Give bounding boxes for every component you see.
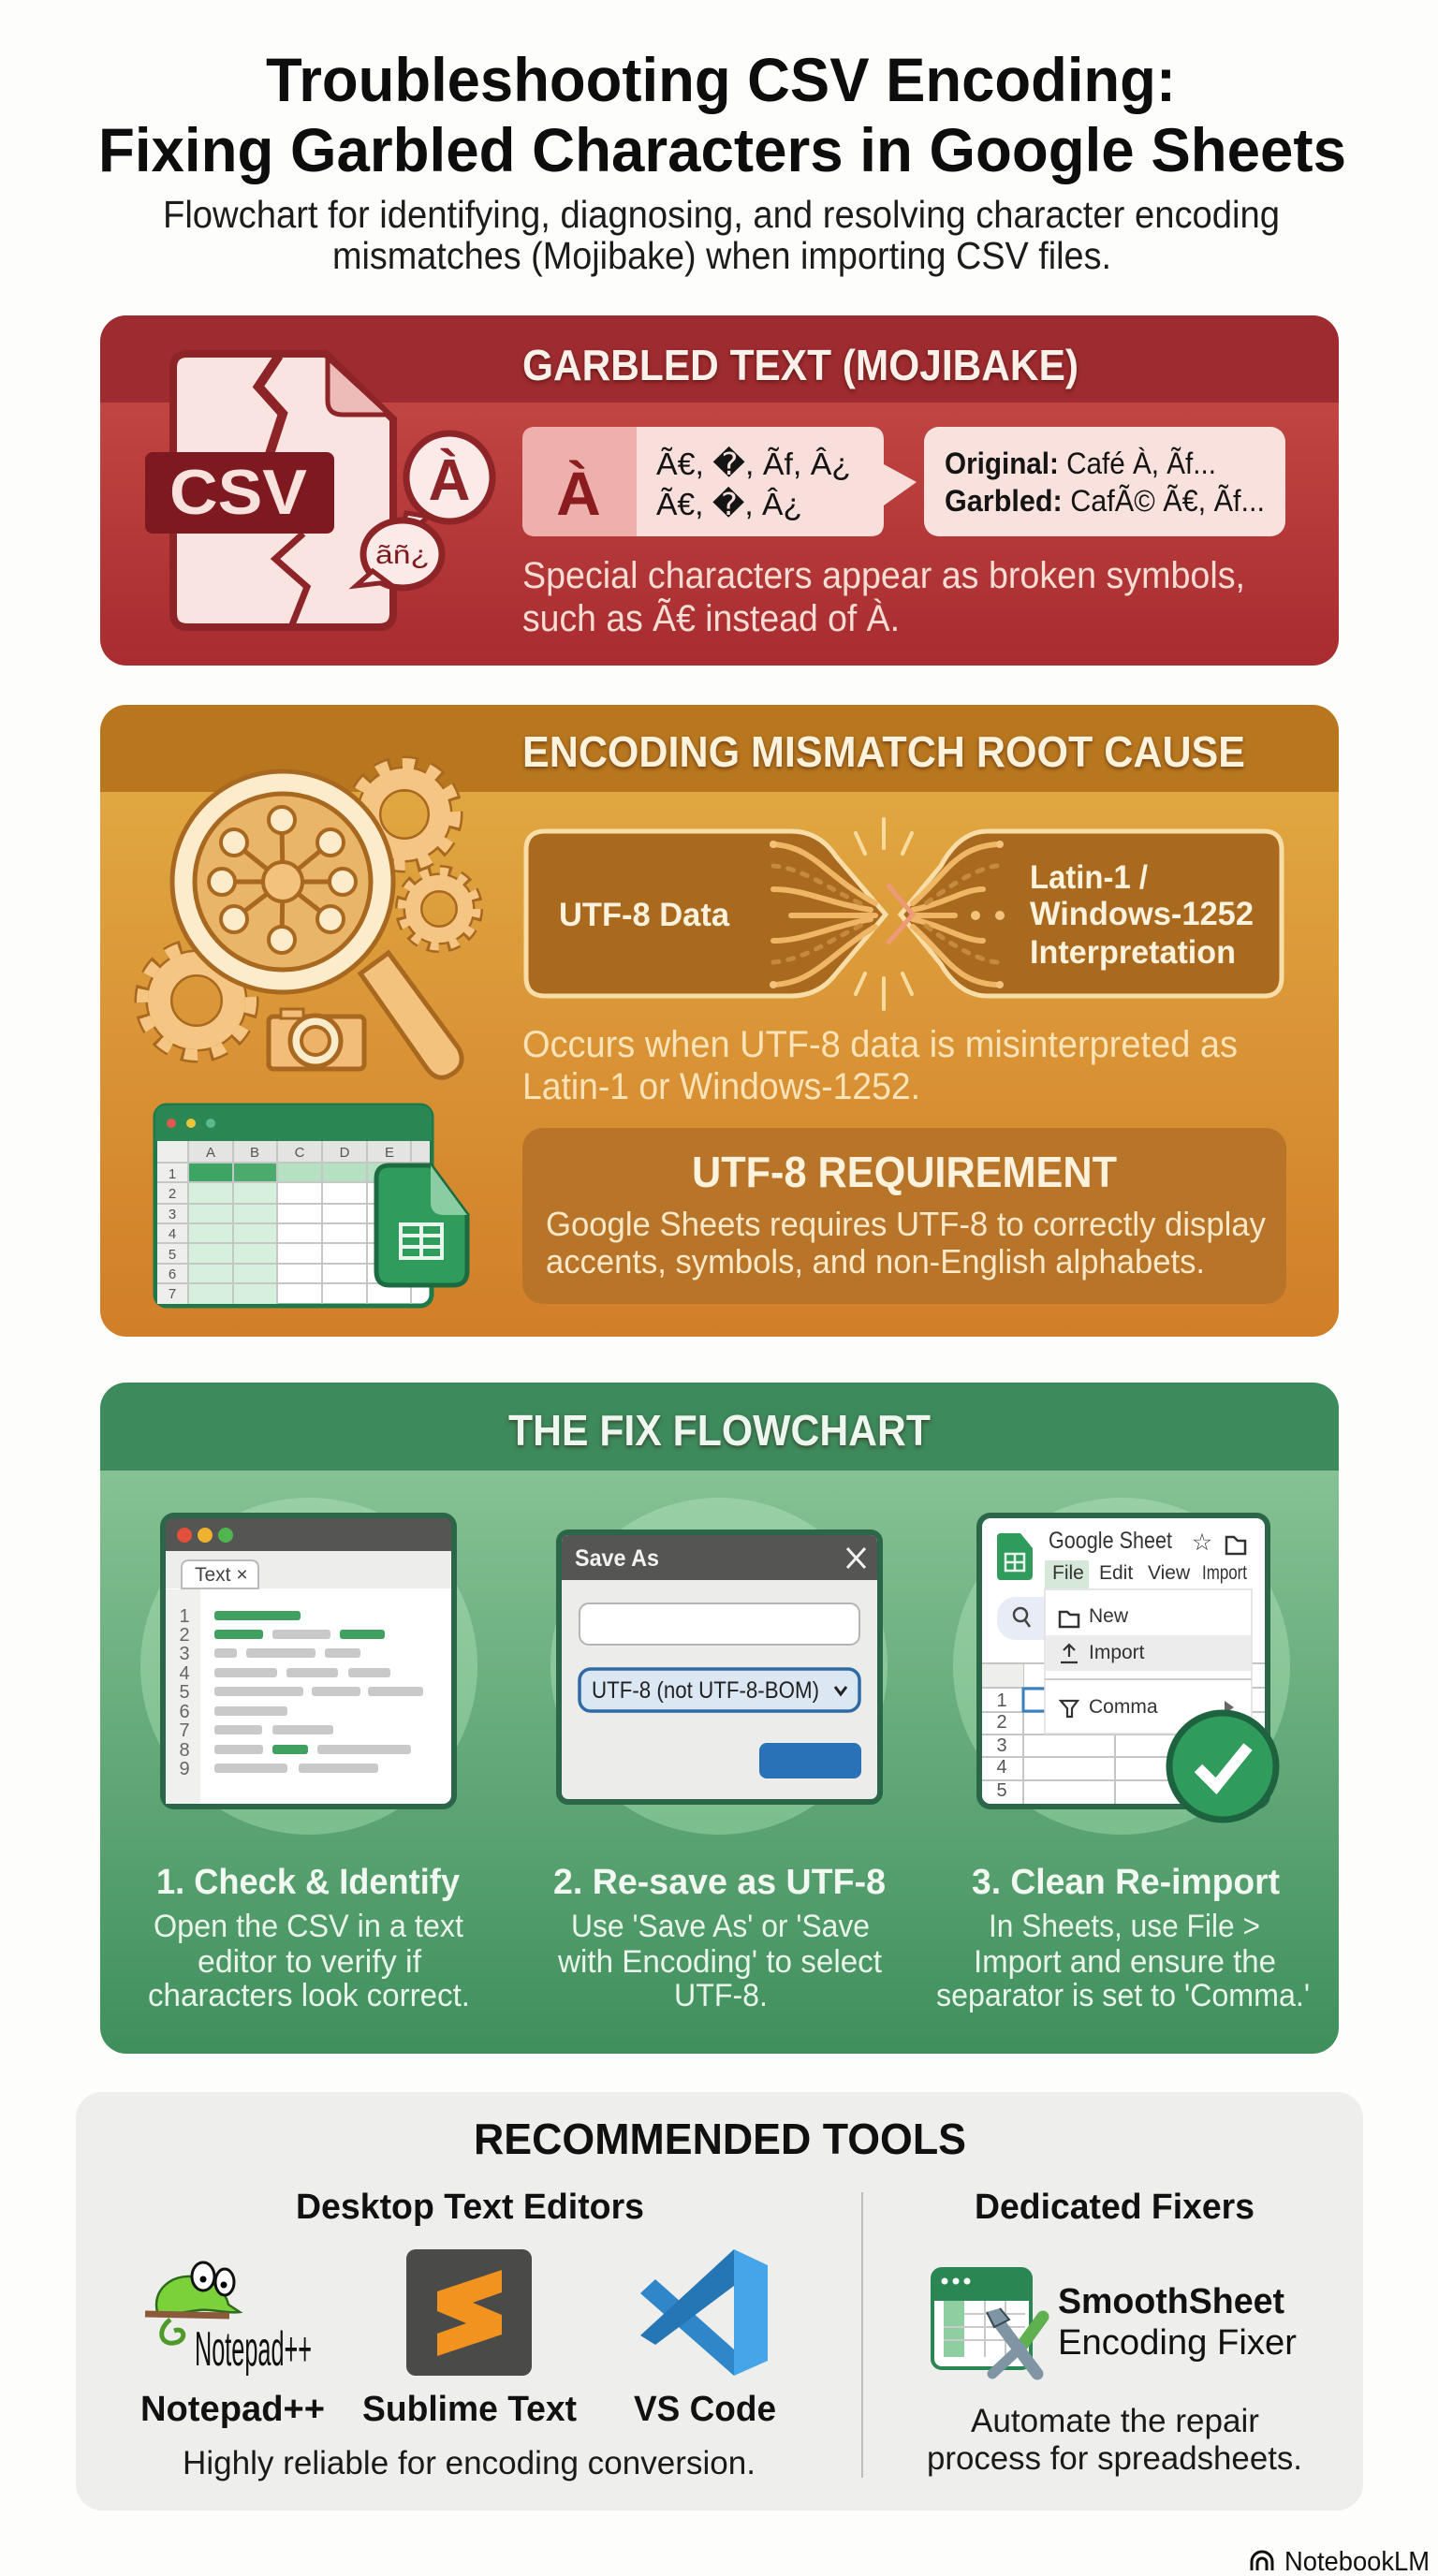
step 1: text editor window: 8 [179, 1740, 190, 1761]
callout: UTF-8 requirement: accents, symbols, and non-English alphabets. [546, 1242, 1205, 1281]
diagram: encoding collision: UTF-8 Data [559, 897, 730, 933]
step 2: save as dialog [550, 1498, 888, 1835]
step 2 text [553, 1863, 886, 2013]
card: original vs garbled: Original: Café À, Ãf... [945, 446, 1216, 480]
panel: garbled text [100, 315, 1339, 666]
card: garbled variants: Ã€, �, Â¿ [656, 486, 802, 521]
step 3: sheets import window [953, 1498, 1290, 1835]
step 1 text [148, 1863, 470, 2013]
diagram: encoding collision: Interpretation [1030, 934, 1236, 971]
heading: dedicated fixers: Dedicated Fixers [975, 2188, 1255, 2227]
step 1: text editor window: 6 [179, 1702, 190, 1722]
diagram: encoding collision [526, 819, 1282, 1009]
tool labels: Notepad++ [140, 2390, 325, 2429]
description: root cause [522, 1024, 1238, 1107]
text: SmoothSheet name: SmoothSheet [1058, 2282, 1284, 2321]
icon: spreadsheet window: 6 [169, 1266, 176, 1282]
step 1: text editor window: 3 [179, 1644, 190, 1664]
icon: broken CSV file: À [429, 448, 470, 513]
step 1 text: 1. Check & Identify [156, 1863, 460, 1902]
step 3: sheets import window: Google Sheet [1049, 1528, 1172, 1554]
tool labels: VS Code [634, 2390, 776, 2429]
step 2 text: Use 'Save As' or 'Save [571, 1909, 870, 1944]
step 2: save as dialog: Save As [575, 1545, 659, 1572]
heading: recommended tools: RECOMMENDED TOOLS [474, 2115, 966, 2163]
step 3: sheets import window: 4 [996, 1757, 1007, 1778]
step 2 text: UTF-8. [674, 1978, 768, 2013]
icon: spreadsheet window: C [295, 1145, 305, 1161]
card: garbled variants: Ã€, �, Ãf, Â¿ [656, 446, 851, 481]
step 1: text editor window: 2 [179, 1625, 190, 1646]
step 3 text [936, 1863, 1310, 2013]
step 1: text editor window: 9 [179, 1759, 190, 1779]
title: Fixing Garbled Characters in Google Sheets [98, 115, 1346, 184]
icon: broken CSV file: CSV [169, 457, 307, 528]
step 3: sheets import window: 2 [996, 1712, 1007, 1733]
title: Troubleshooting CSV Encoding: [266, 45, 1176, 114]
panel: root cause [100, 705, 1339, 1337]
icon: spreadsheet window: 1 [169, 1166, 176, 1182]
step 3: sheets import window: New [1089, 1605, 1129, 1627]
card: garbled variants [522, 427, 917, 536]
callout: UTF-8 requirement: UTF-8 REQUIREMENT [692, 1148, 1117, 1196]
step 3: sheets import window: Comma [1089, 1696, 1158, 1718]
icon: spreadsheet window: B [250, 1145, 259, 1161]
text: SmoothSheet name [1058, 2282, 1297, 2363]
step 1: text editor window: 1 [179, 1606, 190, 1627]
card: original vs garbled [924, 427, 1285, 536]
description: garbled: such as Ã€ instead of À. [522, 597, 900, 639]
step 3: sheets import window: File [1052, 1562, 1084, 1584]
step 3 text: 3. Clean Re-import [972, 1863, 1280, 1902]
step 1: text editor window: 5 [179, 1682, 190, 1703]
description: garbled [522, 555, 1245, 639]
text: fixers note: Automate the repair [971, 2403, 1259, 2439]
text: editors note: Highly reliable for encoding conversion. [183, 2445, 756, 2481]
step 1: text editor window: 7 [179, 1720, 190, 1741]
icon: spreadsheet window: 7 [169, 1286, 176, 1302]
step 1 text: Open the CSV in a text [154, 1909, 464, 1944]
heading: fix flowchart: THE FIX FLOWCHART [508, 1406, 931, 1455]
callout: UTF-8 requirement [522, 1128, 1286, 1304]
step 1: text editor window: 4 [179, 1663, 190, 1684]
step 3: sheets import window: View [1148, 1562, 1191, 1584]
step 2 text: 2. Re-save as UTF-8 [553, 1863, 886, 1902]
icon: spreadsheet window: 5 [169, 1247, 176, 1263]
step 3: sheets import window: Import [1089, 1642, 1145, 1663]
subtitle: Flowchart for identifying, diagnosing, and resolving character encoding [163, 193, 1280, 236]
step 3: sheets import window: Edit [1099, 1562, 1133, 1584]
step 3 text: Import and ensure the [974, 1944, 1276, 1980]
step 3: sheets import window: ☆ [1192, 1530, 1212, 1556]
step 3 text: separator is set to 'Comma.' [936, 1978, 1310, 2013]
step 1 text: editor to verify if [198, 1944, 422, 1980]
step 3: sheets import window: 1 [996, 1690, 1007, 1711]
icon: spreadsheet window: 3 [169, 1207, 176, 1222]
card: original vs garbled: Garbled: CafÃ© Ã€, Ãf... [945, 484, 1265, 518]
icon: spreadsheet window: 2 [169, 1186, 176, 1202]
icon: spreadsheet window: A [206, 1145, 215, 1161]
step 3: sheets import window: 5 [996, 1780, 1007, 1801]
heading: desktop text editors: Desktop Text Editors [296, 2188, 644, 2227]
heading: garbled text: GARBLED TEXT (MOJIBAKE) [522, 341, 1078, 389]
description: garbled: Special characters appear as broken symbols, [522, 555, 1245, 596]
icon: magnifier with gears and camera [142, 764, 477, 1077]
title [98, 45, 1346, 184]
step 1: text editor window [140, 1498, 477, 1835]
panel: fix flowchart [100, 1383, 1339, 2054]
description: root cause: Occurs when UTF-8 data is misinterpreted as [522, 1024, 1238, 1065]
panel: recommended tools [76, 2092, 1363, 2510]
tool labels: Sublime Text [362, 2390, 577, 2429]
step 3: sheets import window: Import [1202, 1562, 1247, 1584]
subtitle: mismatches (Mojibake) when importing CSV files. [332, 234, 1111, 277]
step 2 text: with Encoding' to select [557, 1944, 883, 1980]
icon: spreadsheet window: E [385, 1145, 394, 1161]
tool labels [140, 2390, 776, 2429]
heading: root cause: ENCODING MISMATCH ROOT CAUSE [522, 727, 1245, 776]
step 1: text editor window: Text × [195, 1564, 248, 1586]
icon: Notepad++ [145, 2262, 312, 2377]
icon: VS Code [640, 2249, 768, 2376]
step 1 text: characters look correct. [148, 1978, 470, 2013]
diagram: encoding collision: Windows-1252 [1030, 896, 1254, 932]
card: garbled variants: À [556, 459, 601, 528]
diagram: encoding collision: Latin-1 / [1030, 859, 1148, 896]
description: root cause: Latin-1 or Windows-1252. [522, 1066, 920, 1107]
callout: UTF-8 requirement: Google Sheets requires UTF-8 to correctly display [546, 1205, 1266, 1243]
step 2: save as dialog: UTF-8 (not UTF-8-BOM) [592, 1677, 819, 1704]
icon: broken CSV file [145, 354, 492, 627]
icon: broken CSV file: ãñ¿ [375, 540, 430, 569]
icon: spreadsheet window: D [340, 1145, 350, 1161]
step 3: sheets import window: 3 [996, 1735, 1007, 1756]
text: SmoothSheet name: Encoding Fixer [1058, 2323, 1297, 2363]
subtitle [163, 193, 1280, 277]
text: fixers note: process for spreadsheets. [927, 2440, 1302, 2477]
step 3 text: In Sheets, use File > [989, 1909, 1260, 1944]
panel: recommended tools: Notepad++ [195, 2322, 312, 2377]
text: fixers note [927, 2403, 1302, 2477]
icon: SmoothSheet [932, 2269, 1043, 2374]
icon: spreadsheet window [155, 1105, 467, 1306]
icon: spreadsheet window: 4 [169, 1226, 176, 1242]
icon: Sublime Text [406, 2249, 532, 2376]
